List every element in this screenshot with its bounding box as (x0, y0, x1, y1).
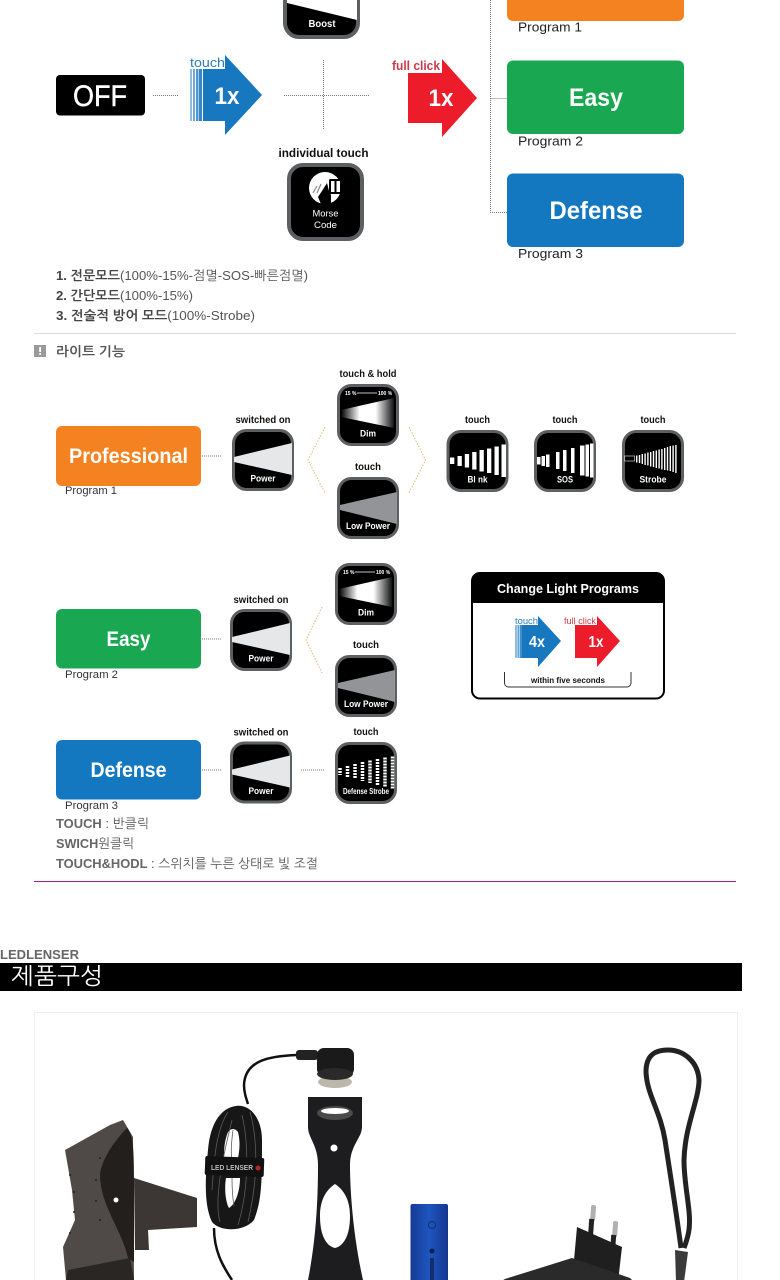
program 3 button (top): Program 3 (518, 246, 583, 261)
connector: program 3 (202, 769, 221, 771)
chevron: left, program 1 (308, 427, 325, 493)
connector: program tree (490, 0, 507, 212)
icon: morse code: Code (314, 220, 337, 231)
panel: change light programs (472, 573, 664, 698)
arrow: touch 1x: 1x (214, 83, 240, 110)
icon: power, program 3: switched on (234, 728, 288, 738)
bracket: within five seconds: within five seconds (530, 675, 605, 685)
label: individual touch: individual touch (278, 148, 368, 160)
cable and connector: LED LENSER (211, 1163, 254, 1172)
program 1 button (56, 426, 201, 497)
arrow: touch 4x: touch (515, 616, 538, 626)
program 2 button (top) (507, 60, 684, 148)
icon: strobe: Strobe (640, 474, 666, 484)
program 1 button (top): Program 1 (518, 20, 582, 34)
panel: product components photo (34, 1012, 738, 1280)
brand name: LEDLENSER (0, 948, 79, 962)
panel: change light programs: Change Light Programs (497, 581, 639, 596)
connector: program 2 (202, 638, 221, 640)
program 3 button (top): Defense (550, 197, 643, 225)
mode 1: 1. 전문모드(100%-15%-점멸-SOS-빠른점멸) (56, 268, 308, 283)
icon: power, program 2: Power (248, 654, 274, 664)
arrow: touch 4x (514, 616, 561, 667)
icon: boost mode (285, 0, 358, 37)
connector: crosshair (284, 60, 370, 129)
belt clip (308, 1097, 363, 1280)
arrow: full click 1x: 1x (588, 634, 604, 651)
chevron: right, program 1 (409, 427, 426, 493)
icon: low power, program 1: touch (355, 462, 381, 473)
arrow: full click 1x: 1x (428, 85, 454, 112)
icon: power, program 1 (234, 415, 292, 490)
icon: morse code (289, 165, 362, 239)
section heading bar: 제품구성 (11, 963, 103, 989)
mode 3: 3. 전술적 방어 모드 (100%-Strobe) (56, 308, 255, 323)
icon: power, program 1: switched on (236, 415, 290, 426)
arrow: full click 1x (563, 616, 620, 667)
icon: strobe: touch (640, 415, 666, 426)
icon: dim, program 1: Dim (360, 428, 376, 438)
arrow: full click 1x: full click (564, 616, 596, 626)
program 2 button (56, 609, 201, 681)
icon: dim, program 1: touch & hold (340, 369, 396, 380)
icon: dim, program 2: 100 % (376, 570, 391, 576)
program 1 button (top) (507, 0, 684, 34)
OFF button: OFF (73, 80, 127, 113)
arrow: full click 1x (391, 58, 477, 137)
icon: low power, program 2: Low Power (344, 699, 388, 709)
icon: dim, program 1 (338, 369, 398, 444)
icon: power, program 2 (232, 595, 290, 670)
connector: power to defense strobe (301, 769, 324, 771)
arrow: touch 4x: 4x (529, 634, 545, 651)
holster (63, 1120, 197, 1280)
icon: blink: touch (465, 415, 490, 426)
icon: SOS: SOS (557, 474, 573, 484)
charger plug (500, 1205, 634, 1280)
icon: power, program 1: Power (250, 474, 276, 484)
icon: boost mode: Boost (308, 19, 336, 30)
icon: morse code: Morse (312, 208, 338, 220)
OFF button (56, 75, 145, 116)
battery (410, 1204, 448, 1280)
program 1 button: Professional (69, 445, 188, 468)
icon: dim, program 2: Dim (358, 608, 374, 618)
program 2 button: Easy (106, 628, 151, 651)
arrow: full click 1x: full click (392, 59, 440, 73)
connector: program 1 (202, 455, 221, 457)
glossary: switch: SWICH원클릭 (56, 836, 134, 851)
icon: defense strobe (336, 727, 396, 802)
arrow: touch 1x (189, 55, 262, 135)
icon: power, program 3: Power (248, 786, 274, 796)
icon: power, program 3 (232, 728, 290, 802)
mode 2: 2. 간단모드(100%-15%) (56, 288, 193, 303)
icon: dim, program 1: 15 % (345, 391, 357, 397)
glossary: touch: TOUCH : 반클릭 (56, 816, 149, 831)
icon: SOS (536, 415, 594, 490)
bracket: within five seconds (504, 672, 631, 687)
icon: blink: Bl nk (468, 474, 488, 484)
program 3 button: Defense (90, 759, 166, 782)
icon: low power, program 1: Low Power (346, 521, 390, 531)
program 2 button: Program 2 (65, 669, 118, 681)
icon: defense strobe: Defense Strobe (343, 787, 389, 796)
lanyard (646, 1050, 699, 1280)
heading: light functions: 라이트 기능 (56, 344, 125, 359)
icon: dim, program 1: 100 % (378, 391, 393, 397)
arrow: touch 1x: touch (190, 55, 225, 70)
glossary text (56, 816, 318, 871)
program 3 button (56, 740, 201, 812)
mode list (56, 268, 308, 323)
icon: low power, program 2 (336, 640, 396, 716)
icon: low power, program 2: touch (353, 640, 379, 651)
glossary: touch and hold: TOUCH&HODL : 스위치를 누른 상태로 빛 조절 (56, 856, 318, 871)
chevron: program 2 (306, 607, 322, 673)
program 3 button: Program 3 (65, 800, 118, 812)
icon: dim, program 2: 15 % (343, 570, 355, 576)
icon: power, program 2: switched on (234, 595, 288, 606)
icon: dim, program 2 (336, 564, 396, 624)
icon: strobe (624, 415, 682, 490)
program 2 button (top): Easy (569, 84, 623, 112)
icon: low power, program 1 (338, 462, 398, 538)
icon: SOS: touch (552, 415, 578, 426)
program 3 button (top) (507, 174, 684, 261)
cable and connector (205, 1048, 354, 1280)
icon: defense strobe: touch (354, 727, 378, 738)
connector: off to touch (153, 94, 178, 96)
section heading bar (0, 963, 742, 991)
program 2 button (top): Program 2 (518, 134, 583, 148)
icon: blink (448, 415, 507, 490)
program 1 button: Program 1 (65, 485, 117, 497)
